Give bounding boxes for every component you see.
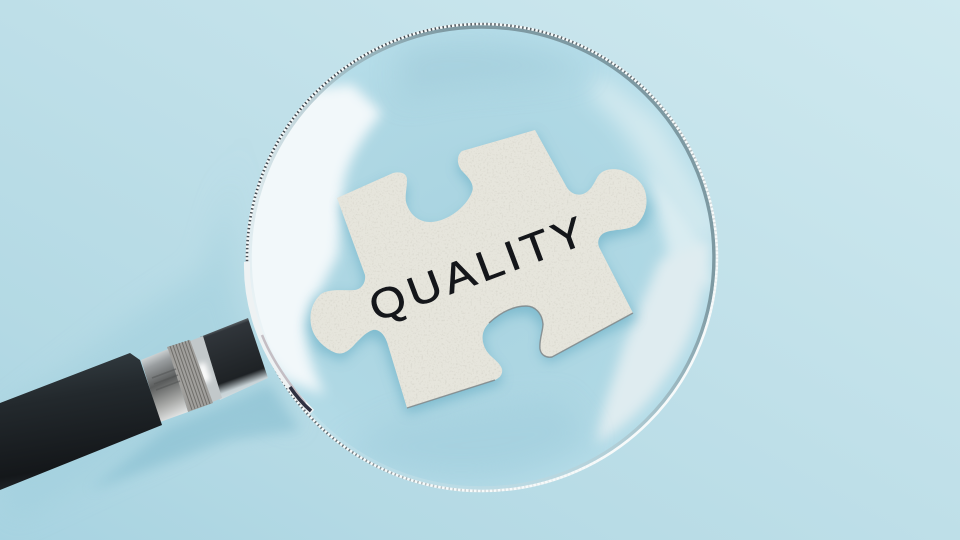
chrome frame at handle joint — [247, 262, 312, 412]
knurled grip — [167, 340, 213, 412]
lens inner band — [250, 27, 714, 488]
word: QUALITY: QUALITY — [363, 208, 591, 331]
puzzle body — [310, 130, 647, 408]
puzzle edge shading — [407, 306, 633, 408]
lens highlights — [240, 75, 725, 444]
puzzle piece — [300, 125, 655, 415]
puzzle paper speckle — [312, 132, 646, 404]
magnifying lens — [240, 24, 725, 491]
ring highlight — [197, 362, 211, 384]
lens rim beading dark — [247, 24, 717, 491]
metal neck — [141, 349, 188, 422]
black grip — [0, 353, 162, 490]
handle — [0, 318, 268, 490]
lens glass — [240, 24, 725, 491]
puzzle shadow — [308, 133, 651, 414]
lens rim beading light — [247, 24, 717, 491]
metal ring — [190, 336, 222, 404]
shadow on background — [0, 130, 300, 520]
metal collar — [200, 318, 268, 400]
blue washes — [340, 42, 590, 479]
